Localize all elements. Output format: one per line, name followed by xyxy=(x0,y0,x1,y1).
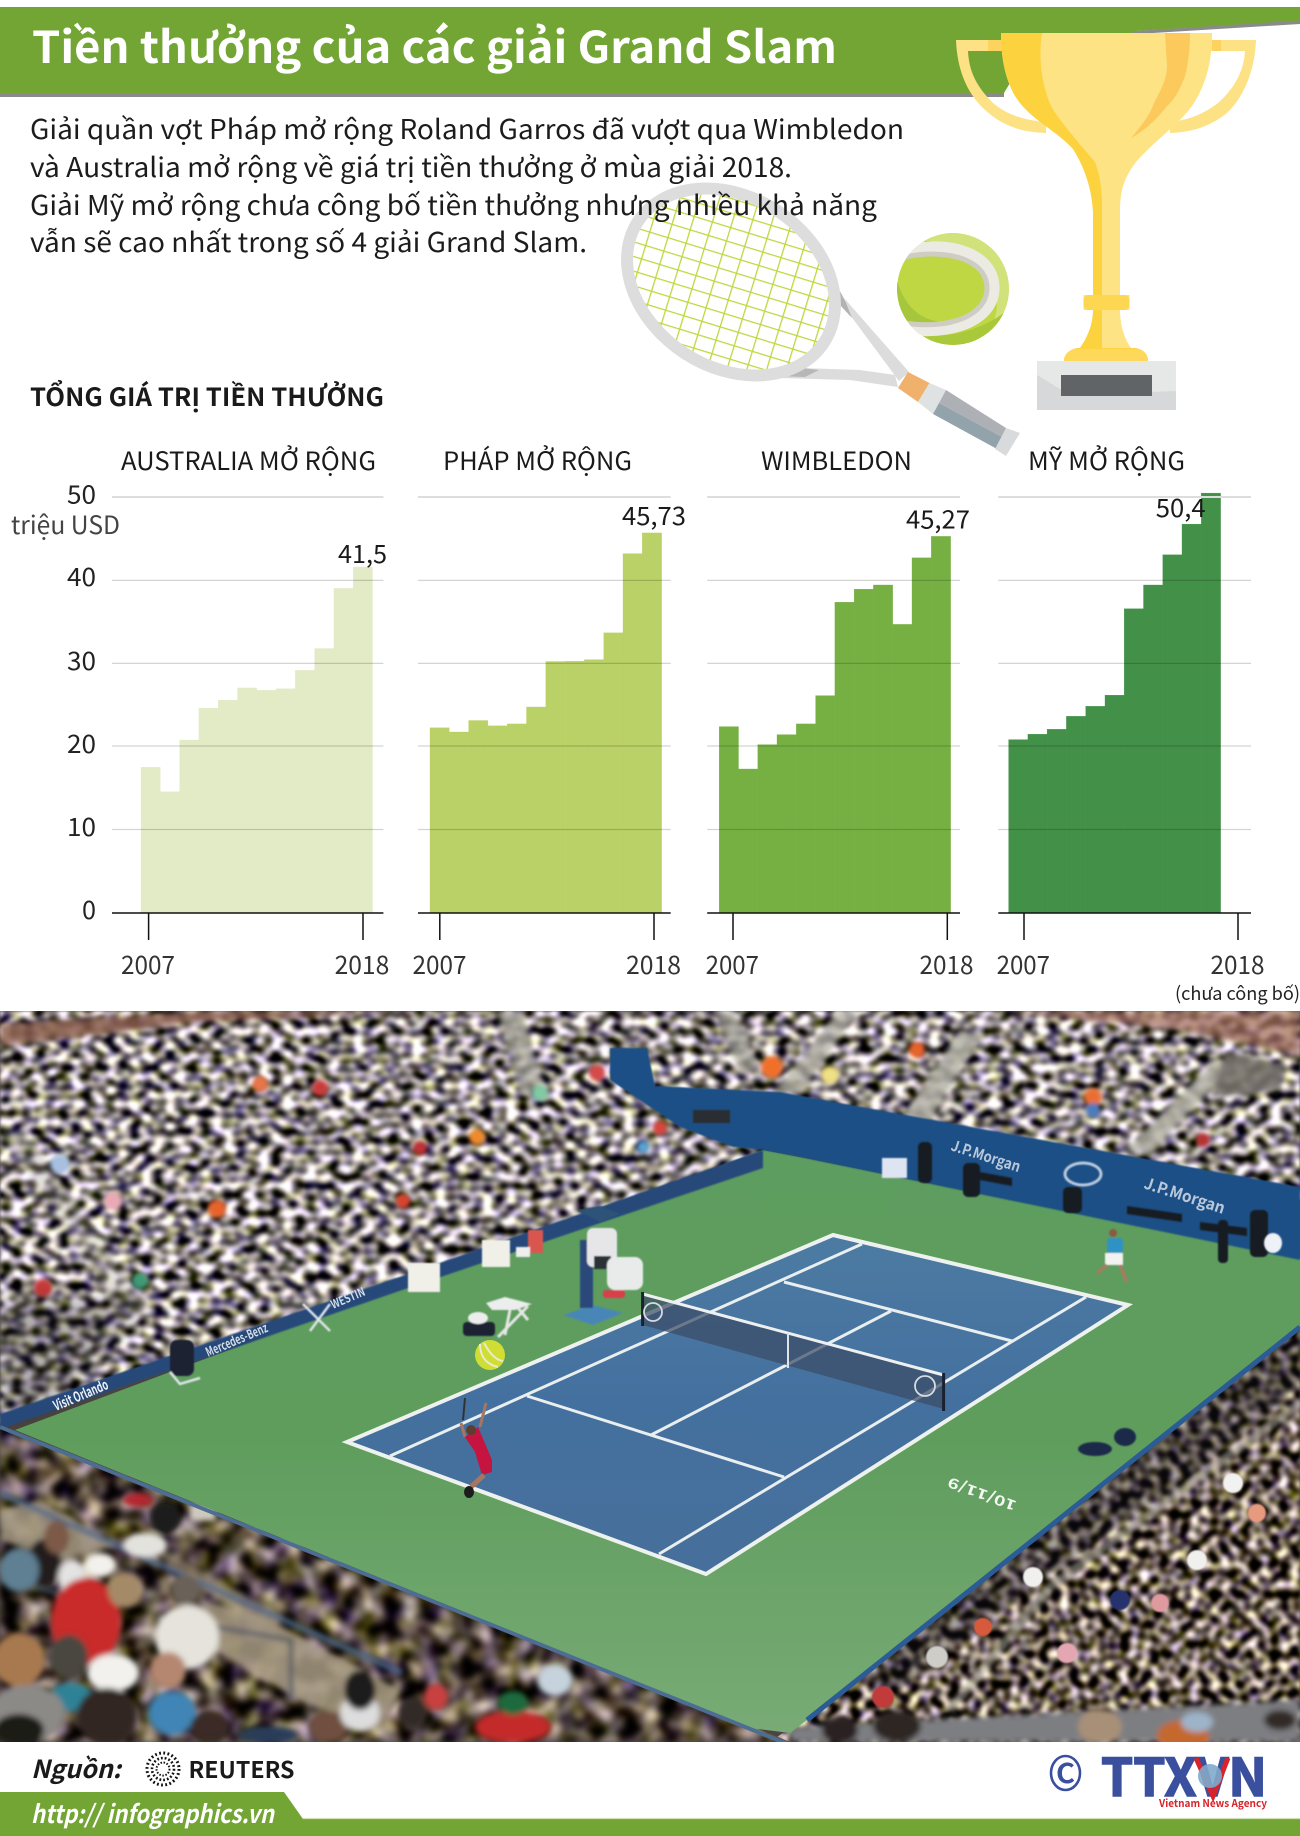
y axis labels: 20 xyxy=(67,725,96,761)
bar chart: Mỹ mở rộng: 50,4 xyxy=(1156,489,1206,525)
title: Tiền thưởng của các giải Grand Slam xyxy=(32,12,837,76)
far player xyxy=(1097,1229,1127,1282)
intro text block: và Australia mở rộng về giá trị tiền thưởng ở mùa giải 2018. xyxy=(30,146,792,185)
net xyxy=(643,1292,944,1411)
intro text block xyxy=(30,108,904,260)
icon: tennis ball xyxy=(895,231,1012,350)
lower right aisles and photographers xyxy=(860,1330,1300,1710)
bar chart: Pháp mở rộng: 45,73 xyxy=(622,497,686,533)
y axis labels: 40 xyxy=(67,558,96,594)
bar chart: Pháp mở rộng: 2018 xyxy=(626,946,681,982)
ball kids xyxy=(1078,1428,1136,1456)
bar chart: Mỹ mở rộng: 2007 xyxy=(997,946,1050,982)
TTXVN logo: C xyxy=(1056,1752,1075,1791)
TTXVN logo: Vietnam News Agency xyxy=(1158,1796,1267,1811)
TTXVN logo: TTXVN xyxy=(1101,1736,1267,1811)
footer source: Nguồn: xyxy=(31,1750,123,1786)
y axis labels: 0 xyxy=(82,891,96,927)
sponsor texts xyxy=(50,1135,1229,1416)
icon: tennis racket xyxy=(592,150,1020,456)
bar chart: Wimbledon: 45,27 xyxy=(906,501,970,537)
y axis labels: triệu USD xyxy=(11,506,120,542)
photo: tennis stadium xyxy=(0,1011,1300,1752)
bar chart: Pháp mở rộng: 2007 xyxy=(412,946,466,982)
crowd: coloured shirts lower right xyxy=(872,1473,1266,1708)
y axis labels: 30 xyxy=(67,642,96,678)
bar chart: Wimbledon: 2007 xyxy=(706,946,759,982)
footer band with url: http:// infographics.vn xyxy=(31,1795,276,1831)
sponsor texts: Visit Orlando xyxy=(50,1374,111,1416)
footer source xyxy=(31,1750,294,1786)
bar chart: Pháp mở rộng: PHÁP MỞ RỘNG xyxy=(443,442,632,478)
stand roof strips and aisles xyxy=(0,1011,1300,1315)
header banner xyxy=(0,7,1300,97)
bar chart: Mỹ mở rộng: MỸ MỞ RỘNG xyxy=(1028,442,1185,478)
blue playing court xyxy=(347,1235,1128,1574)
bar chart: Australia mở rộng: AUSTRALIA MỞ RỘNG xyxy=(121,442,376,478)
intro text block: vẫn sẽ cao nhất trong số 4 giải Grand Slam. xyxy=(30,221,587,260)
sponsor texts: J.P.Morgan xyxy=(1141,1170,1229,1219)
wall people and slots xyxy=(918,1142,1268,1263)
bar chart: Australia mở rộng: 2007 xyxy=(121,946,175,982)
bar chart: Mỹ mở rộng: 2018 xyxy=(1210,946,1264,982)
intro text block: Giải quần vợt Pháp mở rộng Roland Garros đã vượt qua Wimbledon xyxy=(30,108,904,147)
y axis labels xyxy=(11,476,120,927)
sponsor texts: J.P.Morgan xyxy=(948,1135,1023,1177)
chart heading: TỔNG GIÁ TRỊ TIỀN THƯỞNG xyxy=(30,378,384,414)
crowd: lower right stands xyxy=(770,1327,1300,1742)
court lines xyxy=(390,1244,1086,1554)
footer source: REUTERS xyxy=(188,1751,294,1785)
crowd: upper stands xyxy=(0,1011,1300,1425)
y axis labels: 10 xyxy=(67,808,96,844)
crowd: lower left stands xyxy=(0,1425,790,1742)
server player xyxy=(461,1398,492,1498)
icon: trophy xyxy=(956,33,1256,410)
bar chart: Australia mở rộng: 41,5 xyxy=(338,535,387,571)
bar chart: Australia mở rộng xyxy=(112,442,389,982)
y axis labels: 50 xyxy=(67,476,96,512)
stadium walls xyxy=(610,1048,1300,1260)
green court surround xyxy=(15,1150,1300,1733)
bar chart: Wimbledon: 2018 xyxy=(920,946,974,982)
umpire chair and courtside items xyxy=(408,1206,643,1337)
intro text block: Giải Mỹ mở rộng chưa công bố tiền thưởng nhưng nhiều khả năng xyxy=(30,184,877,223)
footer band with url xyxy=(0,1792,1300,1836)
bar chart: Wimbledon: WIMBLEDON xyxy=(761,442,912,478)
lower right grey rail band xyxy=(786,1696,1300,1742)
line judge and chair xyxy=(170,1304,330,1384)
sponsor texts: WESTIN xyxy=(328,1283,368,1313)
bar chart: Mỹ mở rộng: (chưa công bố) xyxy=(1175,980,1300,1006)
bar chart: Australia mở rộng: 2018 xyxy=(335,946,389,982)
tennis ball overlay xyxy=(475,1340,505,1370)
crowd: dark lower rows of upper stands xyxy=(0,1300,150,1420)
court logo text: 10/11/9 xyxy=(945,1472,1019,1516)
icon: Reuters logo xyxy=(147,1753,179,1785)
crowd: coloured shirts upper stands xyxy=(34,1042,1210,1297)
bar chart: Pháp mở rộng xyxy=(412,442,686,982)
sponsor texts: Mercedes-Benz xyxy=(202,1317,271,1361)
bar chart: Mỹ mở rộng xyxy=(997,442,1300,1006)
lower left seat tones and spectators xyxy=(0,1493,573,1746)
bar chart: Wimbledon xyxy=(706,442,974,982)
